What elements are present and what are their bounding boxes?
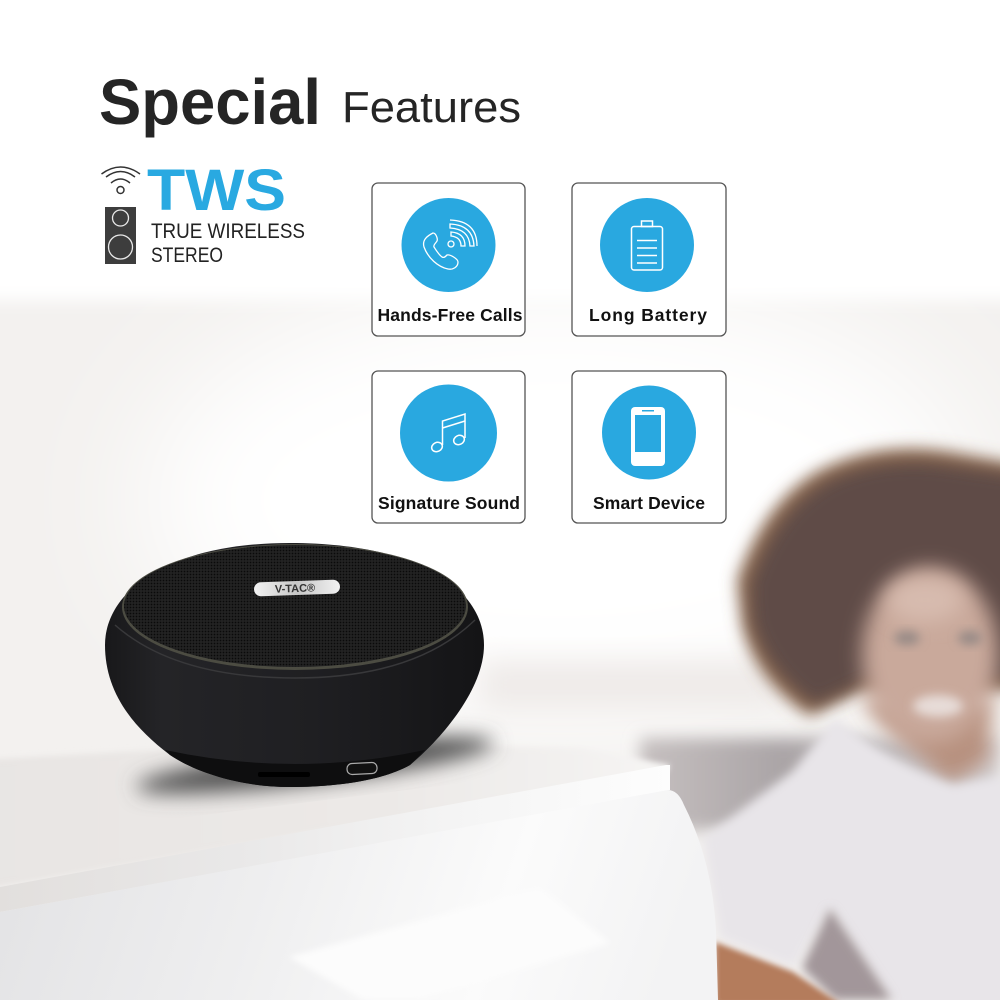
gap behind arm xyxy=(802,908,892,1000)
panel: Smart Device xyxy=(572,371,726,523)
hair xyxy=(750,462,1000,705)
icon: battery xyxy=(632,221,662,270)
white glossy table xyxy=(0,742,718,1000)
icon: phone with signal xyxy=(424,220,477,269)
label: Signature Sound xyxy=(378,493,520,513)
hair outer glow xyxy=(737,449,1000,716)
icon: smartphone xyxy=(631,407,665,466)
TWS description: STEREO xyxy=(151,244,223,267)
panel: Hands-Free Calls xyxy=(372,183,525,336)
TWS description: TRUE WIRELESS xyxy=(151,220,305,243)
title: Features xyxy=(342,83,521,132)
icon: music notes xyxy=(430,414,466,453)
title xyxy=(99,66,521,138)
icon: loudspeaker xyxy=(105,207,136,264)
micro USB port xyxy=(347,762,377,775)
blurred person xyxy=(640,449,1000,1000)
icon: wifi waves xyxy=(102,167,140,194)
title: Special xyxy=(99,66,321,138)
TWS heading: TWS xyxy=(147,158,286,223)
V-TAC badge: V-TAC® xyxy=(275,582,315,596)
panel: Signature Sound xyxy=(372,371,525,523)
face xyxy=(862,567,998,743)
label: Smart Device xyxy=(593,493,705,513)
shirt xyxy=(703,718,1000,1000)
speaker mesh grille xyxy=(124,545,466,667)
speaker body xyxy=(105,543,484,787)
neck xyxy=(860,700,990,785)
TWS description xyxy=(151,220,305,267)
speaker rim xyxy=(122,544,468,670)
speaker base xyxy=(165,750,425,787)
speaker product xyxy=(105,543,484,787)
label: Long Battery xyxy=(589,305,707,325)
TWS logo xyxy=(102,158,305,267)
arm xyxy=(715,942,842,1000)
card slot xyxy=(258,772,310,777)
speaker shadow xyxy=(134,725,496,805)
panel: Long Battery xyxy=(572,183,726,336)
label: Hands-Free Calls xyxy=(378,305,523,325)
V-TAC badge xyxy=(254,580,340,596)
sofa xyxy=(640,738,1000,830)
